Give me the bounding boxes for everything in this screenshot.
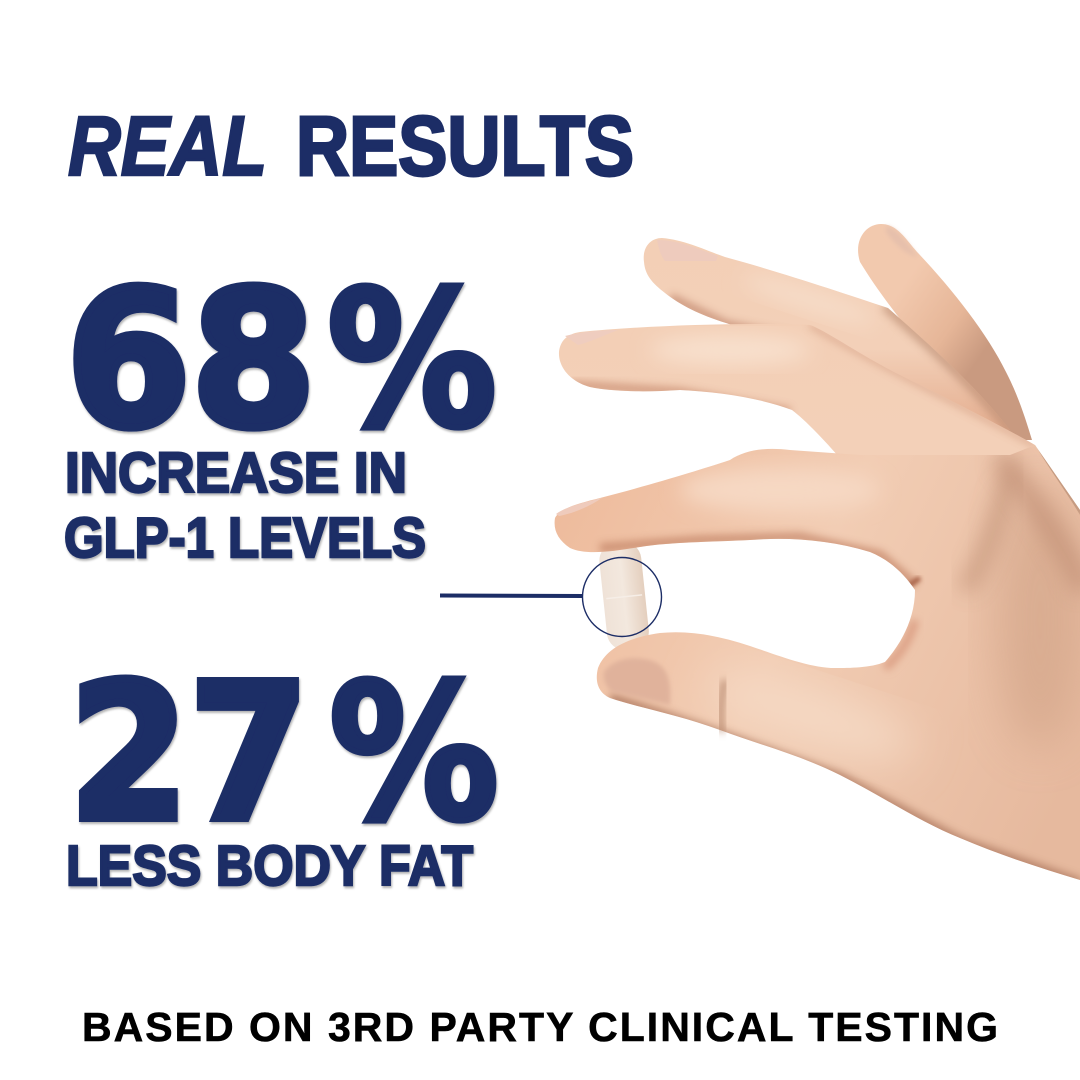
title: RESULTS xyxy=(296,99,634,193)
index finger, thumb and palm xyxy=(555,445,1080,884)
thumb crease xyxy=(721,680,725,732)
shading xyxy=(995,490,1080,750)
callout: line and circle pointing at capsule xyxy=(440,558,662,636)
back finger xyxy=(644,238,1012,440)
hand holding capsule xyxy=(555,224,1080,884)
label: increase in GLP-1 levels: GLP-1 LEVELS xyxy=(64,506,426,570)
middle finger xyxy=(559,324,1080,515)
number: 27%: 27 xyxy=(69,644,309,863)
label: increase in GLP-1 levels: INCREASE IN xyxy=(65,441,407,505)
number: 68% xyxy=(66,251,497,470)
stat: 68% increase in GLP-1 levels xyxy=(64,251,497,570)
number: 27% xyxy=(69,644,499,863)
label: less body fat: LESS BODY FAT xyxy=(66,834,473,898)
title xyxy=(68,99,634,193)
footer note: BASED ON 3RD PARTY CLINICAL TESTING xyxy=(82,1004,998,1050)
index fingernail xyxy=(556,498,602,516)
capsule xyxy=(598,540,651,652)
thumbnail xyxy=(604,658,670,705)
number: 68%: 68 xyxy=(66,251,316,470)
number: 27%: % xyxy=(329,644,499,863)
number: 68%: % xyxy=(327,251,497,470)
little finger xyxy=(858,224,1032,440)
stat: 27% less body fat xyxy=(66,644,499,898)
title: REAL xyxy=(68,99,267,193)
label: increase in GLP-1 levels xyxy=(64,441,426,570)
